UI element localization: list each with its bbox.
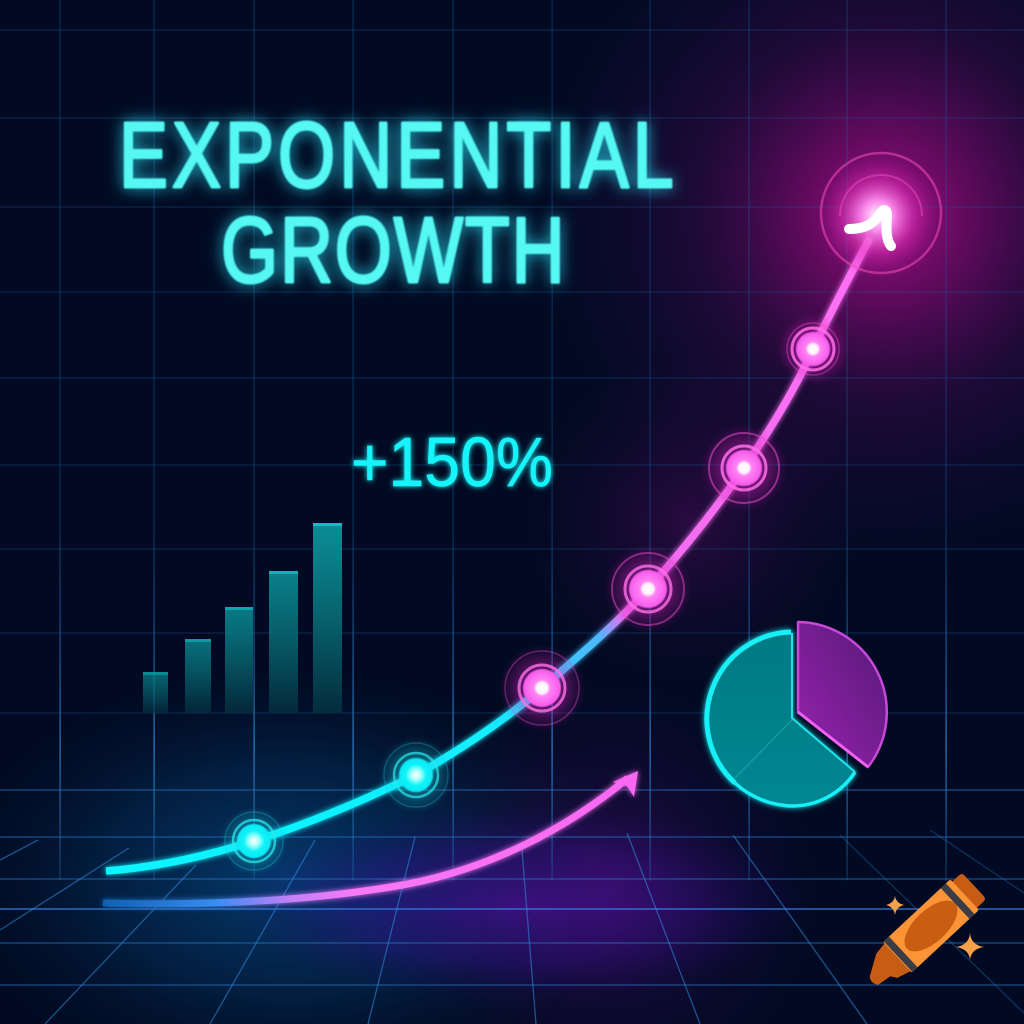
main exponential curve (106, 238, 870, 871)
node: cyan 2 (378, 737, 454, 813)
arrowhead target with glow (816, 153, 941, 278)
growth arrow: secondary curve (103, 771, 638, 904)
node: pink 2 (604, 545, 692, 633)
node: pink 3 (700, 424, 788, 512)
stat: +150%: +150% (351, 423, 553, 501)
node: pink 4 (777, 313, 849, 385)
pie: teal slice (707, 632, 855, 806)
node: pink 1 (498, 644, 586, 732)
title: Exponential Growth: GROWTH (221, 198, 565, 302)
node: cyan 1 (220, 807, 288, 875)
pie: purple slice (798, 622, 887, 767)
icon: crayon (857, 870, 988, 997)
bar chart (143, 523, 342, 713)
title: Exponential Growth (119, 103, 674, 302)
pie chart (707, 622, 887, 806)
icon: large sparkle (956, 933, 984, 960)
icon: small sparkle (886, 896, 904, 915)
title: Exponential Growth: EXPONENTIAL (119, 103, 674, 207)
